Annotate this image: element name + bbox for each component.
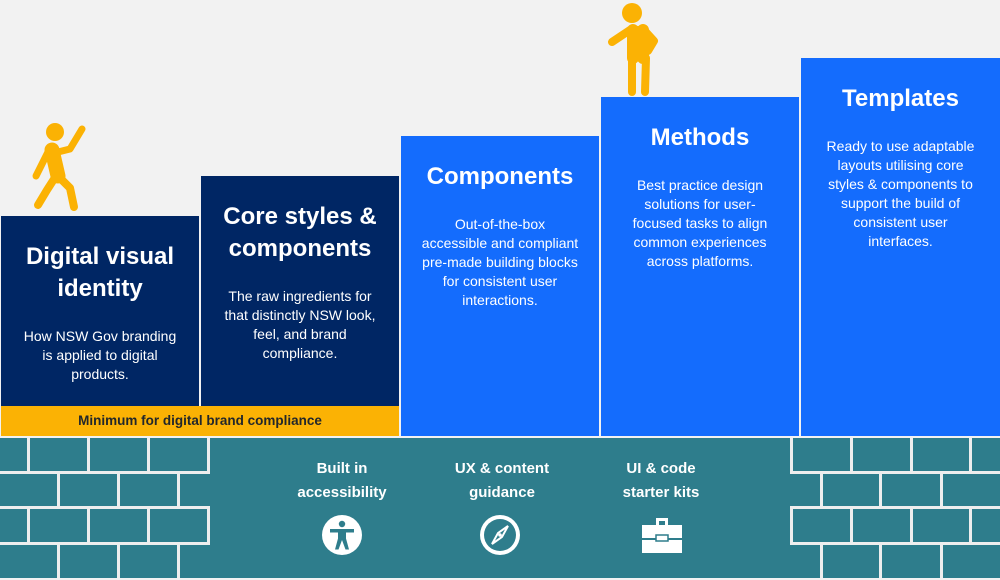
icon: person walking [32, 123, 86, 211]
label: ui code starter kits: UI & code [626, 460, 696, 477]
panel: templates: layouts utilising core [837, 157, 964, 173]
band: minimum compliance: Minimum for digital brand compliance [78, 413, 322, 428]
panel: digital visual identity: is applied to digital [42, 347, 158, 363]
panel: templates: interfaces. [868, 233, 933, 249]
label: ux content guidance: UX & content [455, 460, 549, 477]
panel: templates: consistent user [853, 214, 948, 230]
panel: core styles: feel, and brand [253, 326, 347, 342]
label: built in accessibility: accessibility [297, 484, 387, 501]
icon: toolbox [642, 518, 682, 553]
panel: digital visual identity [1, 216, 199, 406]
panel: core styles [201, 176, 399, 406]
panel: templates: Ready to use adaptable [827, 138, 974, 154]
panel: components [401, 136, 599, 436]
panel: components: interactions. [462, 292, 538, 308]
label: ux content guidance: guidance [469, 484, 535, 501]
panel: methods: across platforms. [647, 253, 753, 269]
panel: core styles: Core styles & [223, 203, 377, 230]
panel: components: pre-made building blocks [422, 254, 578, 270]
panel: templates [801, 58, 1000, 436]
panel: methods: solutions for user- [644, 196, 756, 212]
label: ui code starter kits: starter kits [623, 484, 699, 501]
panel: digital visual identity: identity [57, 275, 143, 302]
panel: methods: common experiences [633, 234, 767, 250]
panel: core styles: components [229, 235, 371, 262]
panel: templates: styles & components to [828, 176, 973, 192]
panel: digital visual identity: Digital visual [26, 243, 174, 270]
panel: components: Out-of-the-box [455, 216, 545, 232]
icon: accessibility [322, 515, 362, 555]
panel: core styles: The raw ingredients for [228, 288, 372, 304]
band: minimum compliance [1, 406, 399, 436]
panel: digital visual identity: How NSW Gov branding [24, 328, 176, 344]
panel: components: Components [427, 163, 573, 190]
panel: methods: Best practice design [637, 177, 763, 193]
panel: core styles: compliance. [263, 345, 337, 361]
panel: components: for consistent user [443, 273, 557, 289]
label: built in accessibility: Built in [317, 460, 367, 477]
icon: compass [480, 515, 520, 555]
panel: templates: support the build of [841, 195, 960, 211]
panel: components: accessible and compliant [422, 235, 578, 251]
panel: methods: Methods [651, 124, 749, 151]
label: built in accessibility [297, 460, 387, 501]
panel: templates: Templates [842, 85, 959, 112]
panel: digital visual identity: products. [71, 366, 129, 382]
label: ui code starter kits [623, 460, 699, 501]
label: ux content guidance [455, 460, 549, 501]
icon: person standing [608, 3, 658, 96]
panel: methods: focused tasks to align [633, 215, 767, 231]
panel: methods [601, 97, 799, 436]
panel: core styles: that distinctly NSW look, [225, 307, 375, 323]
